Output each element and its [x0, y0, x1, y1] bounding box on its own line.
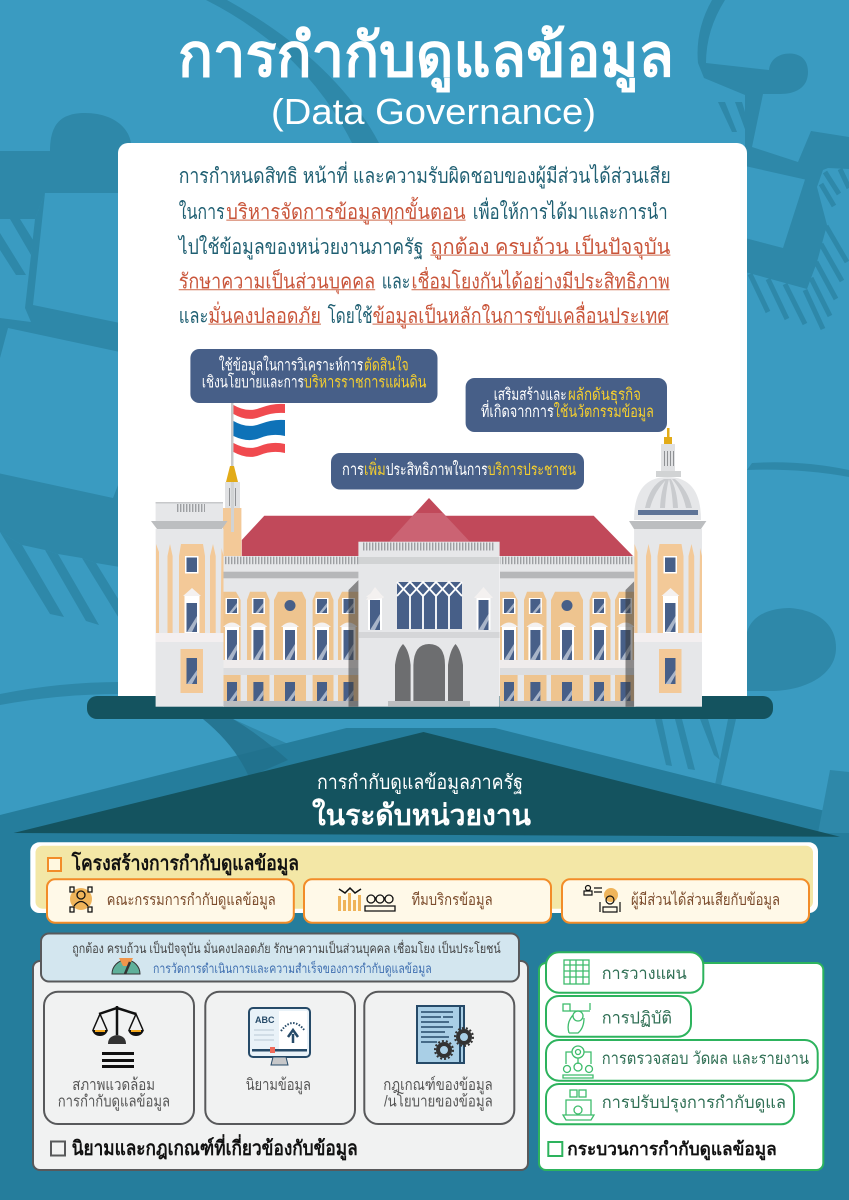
triangle heading: การกำกับดูแลข้อมูลภาครัฐ [317, 772, 523, 795]
callout: business: ที่เกิดจากการ [481, 400, 554, 421]
icon: monitor book [249, 1008, 310, 1065]
callout: policy decisions [190, 349, 438, 403]
subtitle: (Data Governance) [271, 91, 596, 132]
text block: definition: โดยใช้ [328, 304, 372, 328]
card: data dictionary [205, 992, 355, 1124]
flag [231, 403, 285, 531]
text block: definition: และ [382, 270, 410, 294]
metrics card: การวัดการดำเนินการและความสำเร็จของการกำกับดูแลข้อมูล [153, 959, 432, 977]
callout: policy decisions: ใช้ข้อมูลในการวิเคราะห์การ [219, 356, 363, 376]
text block: definition: มั่นคงปลอดภัย [208, 301, 321, 328]
left spire [223, 466, 241, 558]
pill: improvement: การปรับปรุงการกำกับดูแล [602, 1093, 786, 1113]
checkbox [548, 1142, 562, 1156]
card: data dictionary: นิยามข้อมูล [246, 1076, 311, 1095]
text block: definition: ข้อมูลเป็นหลักในการขับเคลื่อนประเทศ [372, 301, 669, 329]
pill: practice: การปฏิบัติ [602, 1008, 672, 1027]
metrics card: ถูกต้อง ครบถ้วน เป็นปัจจุบัน มั่นคงปลอดภัย รักษาความเป็นส่วนบุคคล เชื่อมโยง เป็นประโยชน์ [72, 939, 501, 957]
triangle heading [14, 732, 840, 837]
illustration: government house [151, 403, 706, 707]
card: environment [44, 992, 194, 1124]
text block: definition: บริหารจัดการข้อมูลทุกขั้นตอน [226, 197, 466, 225]
wings [223, 556, 636, 707]
card: data service team [304, 879, 551, 923]
card: environment: การกำกับดูแลข้อมูล [58, 1093, 170, 1112]
callout: public service [331, 453, 584, 490]
callout: business: เสริมสร้างและ [494, 386, 567, 404]
text block: definition: เชื่อมโยงกันได้อย่างมีประสิทธิภาพ [412, 266, 670, 294]
card: stakeholders: ผู้มีส่วนได้ส่วนเสียกับข้อมูล [631, 890, 780, 910]
panel: definitions and rules [33, 934, 528, 1170]
card: data rules: กฎเกณฑ์ของข้อมูล [383, 1075, 493, 1095]
pill: audit [546, 1040, 818, 1081]
text block: definition [177, 161, 671, 329]
pill: practice [546, 996, 691, 1037]
callout: public service: เพิ่ม [364, 458, 386, 479]
pill: planning: การวางแผน [602, 964, 687, 983]
pill: audit: การตรวจสอบ วัดผล และรายงาน [602, 1049, 809, 1068]
text block: definition: ในการ [179, 200, 225, 224]
callout: business [466, 378, 667, 432]
centre block [358, 542, 500, 707]
panel: white intro [118, 143, 747, 713]
card: data rules [364, 992, 514, 1124]
card: committee: คณะกรรมการกำกับดูแลข้อมูล [107, 891, 276, 910]
callout: public service: ประสิทธิภาพในการ [386, 460, 488, 479]
icon: document gears [417, 1006, 473, 1063]
title: การกำกับดูแลข้อมูล [178, 22, 674, 93]
card: committee [47, 879, 294, 923]
heading: กระบวนการกำกับดูแลข้อมูล [567, 1139, 777, 1161]
text block: definition: เพื่อให้การได้มาและการนำ [473, 197, 668, 224]
text block: definition: รักษาความเป็นส่วนบุคคล [179, 268, 375, 294]
left tower [151, 502, 228, 707]
right tower and dome [629, 428, 706, 707]
callout: public service: บริการประชาชน [488, 461, 576, 479]
triangle heading: ในระดับหน่วยงาน [312, 798, 531, 832]
card: environment: สภาพแวดล้อม [72, 1076, 155, 1094]
icon: scales [92, 1006, 144, 1068]
callout: policy decisions: เชิงนโยบายและการ [202, 373, 304, 392]
pill: improvement [546, 1084, 794, 1124]
lower band [0, 728, 849, 1200]
text block: definition: ไปใช้ข้อมูลของหน่วยงานภาครัฐ [177, 235, 423, 260]
text block: definition: และ [179, 305, 208, 328]
checkbox [48, 858, 61, 871]
callout: policy decisions: ตัดสินใจ [364, 356, 409, 375]
right framework [745, 131, 849, 289]
callout: policy decisions: บริหารราชการแผ่นดิน [304, 374, 426, 392]
icon: monitor book: ABC [255, 1015, 275, 1025]
text block: definition: การกำหนดสิทธิ หน้าที่ และความรับผิดชอบของผู้มีส่วนได้ส่วนเสีย [179, 161, 671, 189]
pill: planning [546, 952, 703, 993]
callout: business: ผลักดันธุรกิจ [568, 386, 641, 405]
doors [395, 644, 463, 701]
base platform [87, 696, 773, 719]
heading: นิยามและกฎเกณฑ์ที่เกี่ยวข้องกับข้อมูล [72, 1133, 358, 1162]
card: data rules: /นโยบายของข้อมูล [384, 1092, 493, 1112]
top right arc and band [698, 0, 808, 147]
card: data service team: ทีมบริกรข้อมูล [412, 891, 493, 910]
panel: data governance structure [30, 842, 818, 923]
roof [242, 498, 633, 556]
checkbox [51, 1142, 65, 1156]
callout: business: ใช้นวัตกรรมข้อมูล [554, 402, 654, 422]
heading: โครงสร้างการกำกับดูแลข้อมูล [71, 851, 299, 877]
metrics card [41, 934, 519, 982]
text block: definition: ถูกต้อง ครบถ้วน เป็นปัจจุบัน [430, 233, 670, 260]
callout: public service: การ [342, 461, 364, 479]
card: stakeholders [562, 879, 809, 923]
panel: governance process [539, 952, 823, 1170]
icon: gauge [112, 958, 140, 974]
